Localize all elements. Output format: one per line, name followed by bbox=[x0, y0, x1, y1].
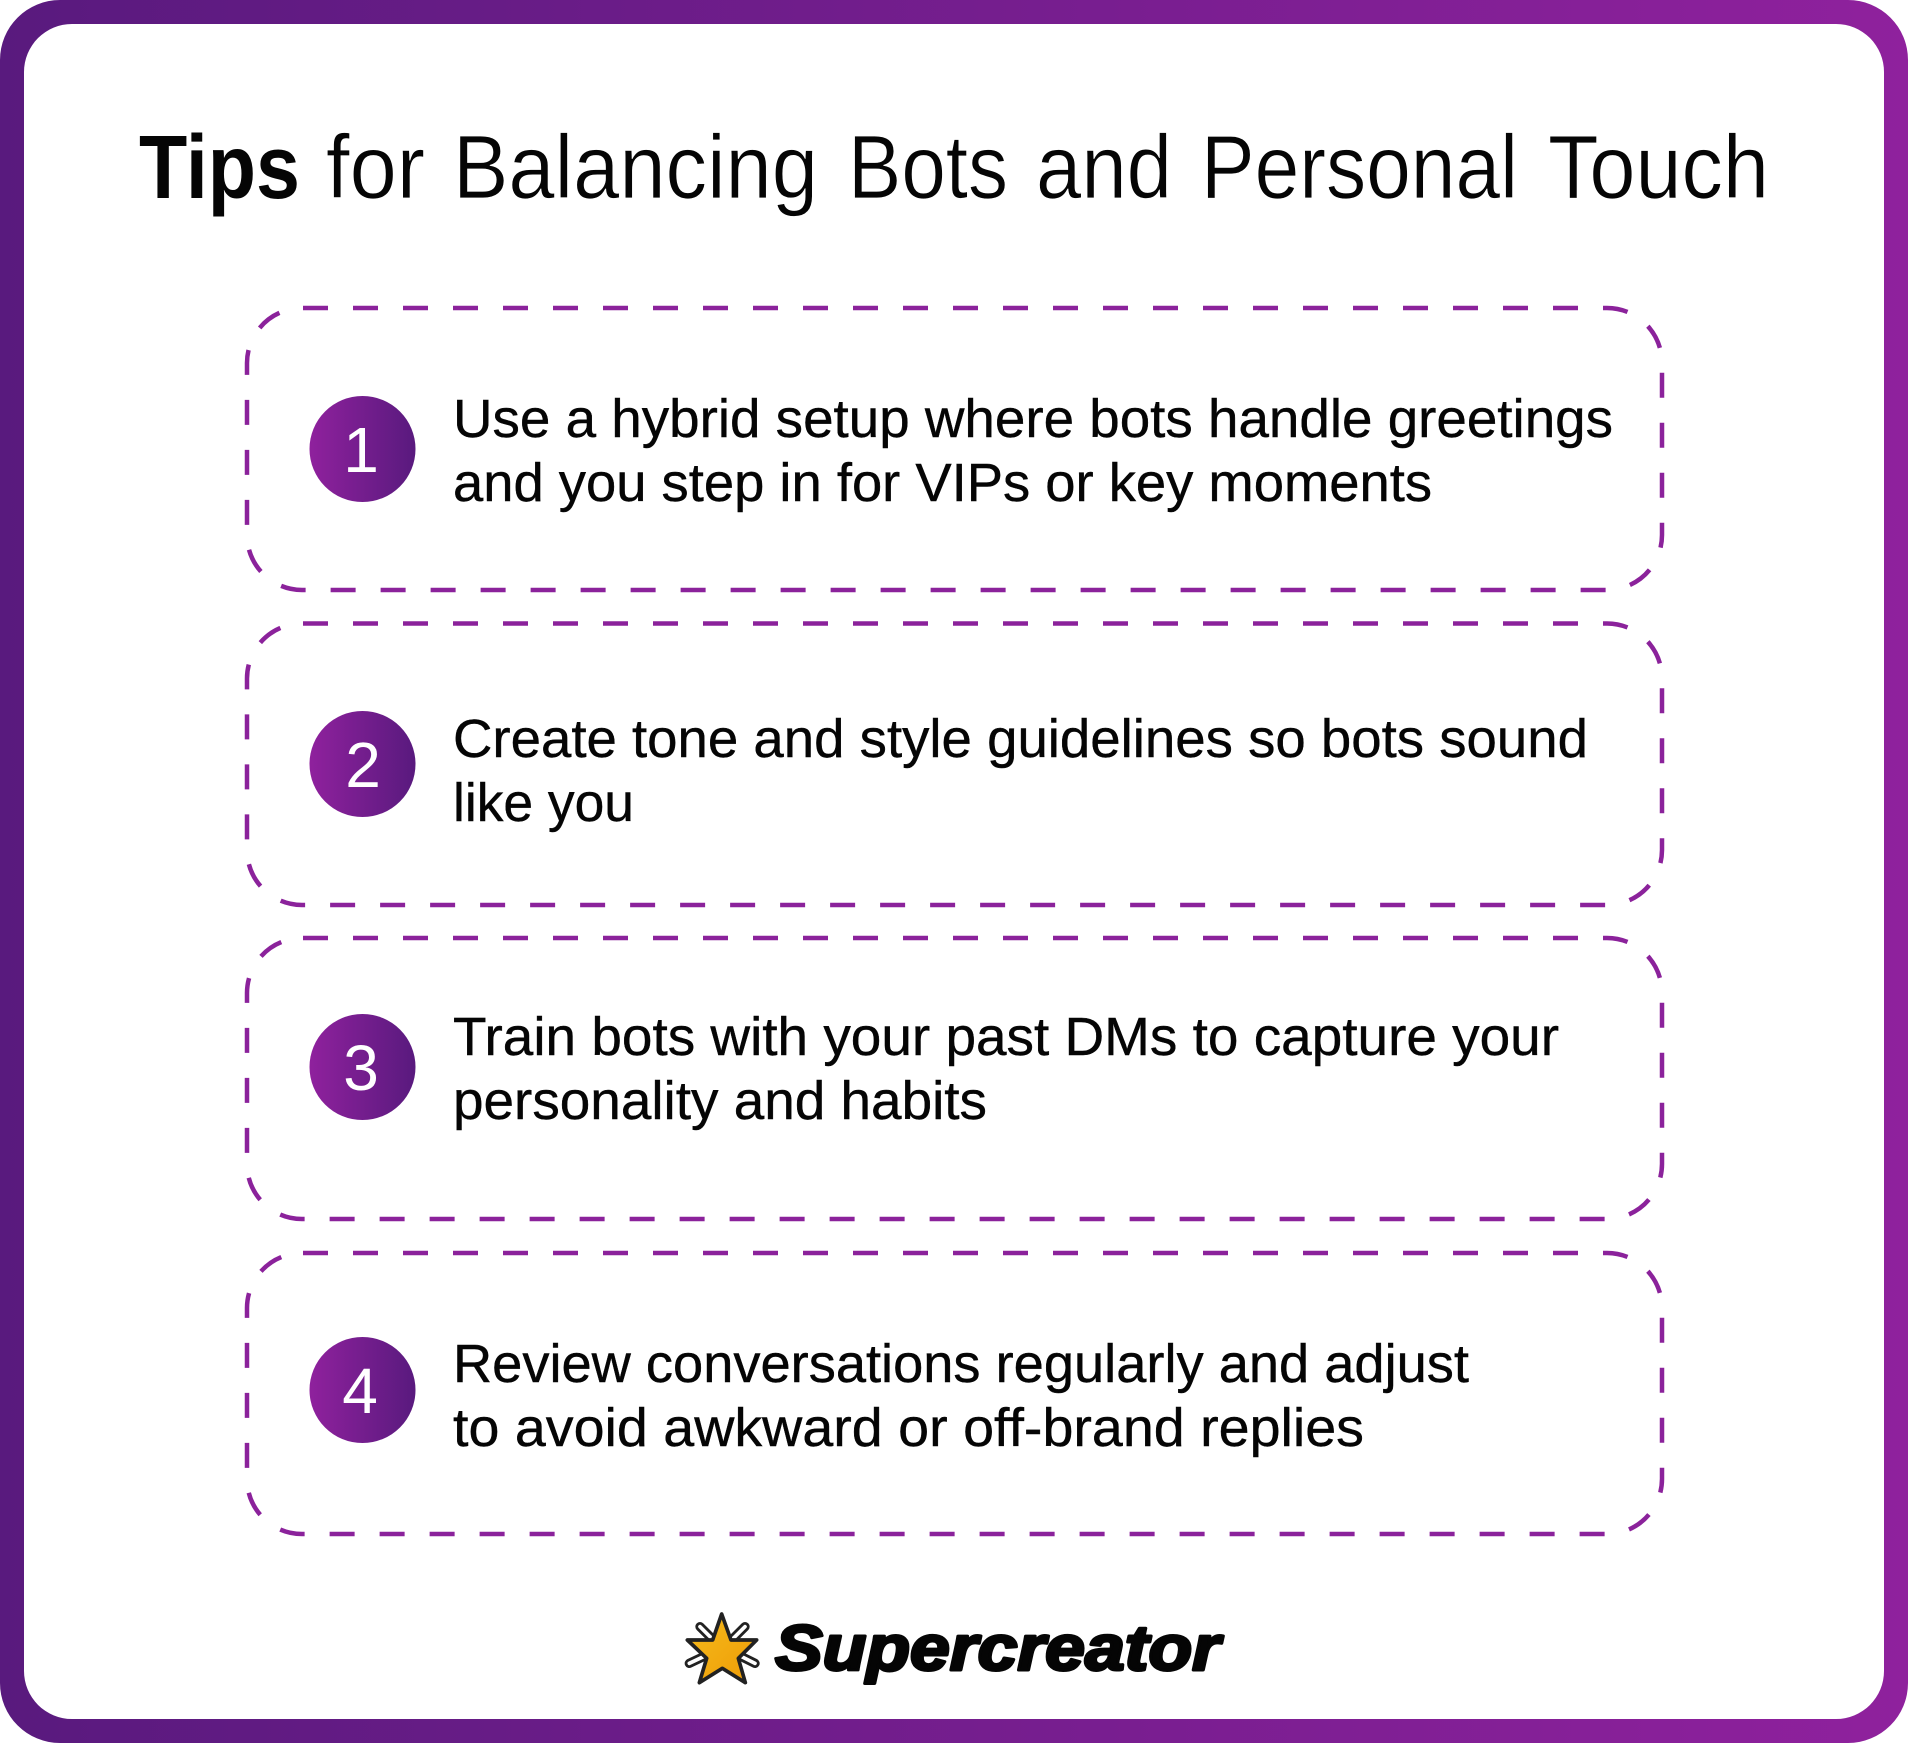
panel: tip 1 bbox=[247, 308, 1662, 590]
title: and bbox=[1036, 118, 1172, 218]
tip 3 text: Train bots with your past DMs to capture your bbox=[453, 1007, 1559, 1067]
title: Personal bbox=[1201, 118, 1518, 218]
tip 2 text: Create tone and style guidelines so bots sound bbox=[453, 709, 1588, 769]
title: Balancing bbox=[453, 118, 818, 218]
title: Bots bbox=[848, 118, 1008, 218]
number badge 1 bbox=[310, 396, 416, 502]
wordmark: Supercreator bbox=[775, 1612, 1223, 1684]
number badge 1: 1 bbox=[343, 414, 379, 486]
number badge 2 bbox=[310, 711, 416, 817]
number badge 3: 3 bbox=[343, 1032, 379, 1104]
panel: tip 3 bbox=[247, 938, 1662, 1219]
number badge 4: 4 bbox=[342, 1355, 378, 1427]
tip 2 text: like you bbox=[453, 773, 634, 833]
tip 1 text: Use a hybrid setup where bots handle greetings bbox=[453, 389, 1613, 449]
title: for bbox=[326, 118, 425, 218]
icon: star bbox=[687, 1614, 757, 1683]
panel: tip 2 bbox=[247, 624, 1662, 905]
panel outline 4 bbox=[247, 1253, 1662, 1534]
logo: Supercreator bbox=[687, 1612, 1223, 1684]
tip 1 text: and you step in for VIPs or key moments bbox=[453, 453, 1432, 513]
tip 3 text bbox=[453, 1007, 1559, 1131]
panel outline 3 bbox=[247, 938, 1662, 1219]
tip 1 text bbox=[453, 389, 1613, 513]
tip 2 text bbox=[453, 709, 1588, 833]
number badge 2: 2 bbox=[345, 729, 381, 801]
tip 4 text: Review conversations regularly and adjust bbox=[453, 1334, 1469, 1394]
title bbox=[139, 118, 1769, 218]
tip 3 text: personality and habits bbox=[453, 1071, 987, 1131]
panel: tip 4 bbox=[247, 1253, 1662, 1534]
tip 4 text bbox=[453, 1334, 1469, 1458]
panel outline 2 bbox=[247, 624, 1662, 905]
number badge 3 bbox=[310, 1014, 416, 1120]
number badge 4 bbox=[310, 1337, 416, 1443]
title: Touch bbox=[1548, 118, 1769, 218]
panel outline 1 bbox=[247, 308, 1662, 590]
title: Tips bbox=[139, 118, 300, 218]
tip 4 text: to avoid awkward or off-brand replies bbox=[453, 1398, 1364, 1458]
